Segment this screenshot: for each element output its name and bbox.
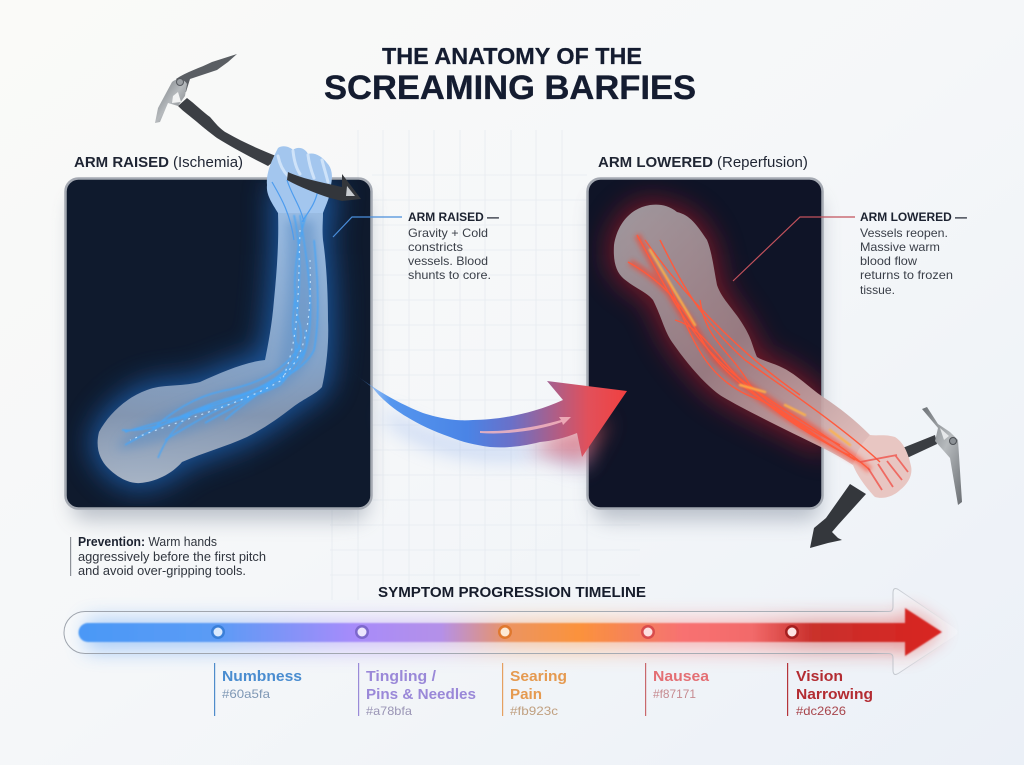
title	[324, 43, 696, 107]
label: vision narrowing: #dc2626	[796, 704, 846, 718]
illustration: blue arm	[98, 146, 332, 483]
node: vision narrowing	[785, 625, 799, 639]
callout: arm raised	[333, 212, 500, 282]
panel: arm lowered	[588, 178, 823, 520]
label: nausea: Nausea	[653, 668, 710, 685]
text block: prevention	[70, 535, 266, 578]
callout: arm raised: Gravity + Cold	[408, 226, 488, 240]
title: SCREAMING BARFIES	[324, 69, 696, 107]
label: tingling: #a78bfa	[366, 704, 412, 718]
illustration: red arm	[614, 205, 911, 498]
label: numbness	[214, 663, 302, 716]
label: numbness: #60a5fa	[222, 687, 270, 701]
panel: arm raised	[66, 178, 372, 520]
label: numbness: Numbness	[222, 668, 302, 685]
callout: arm lowered: Massive warm	[860, 240, 940, 254]
node: tingling	[355, 625, 369, 639]
callout: arm lowered: returns to frozen	[860, 268, 953, 282]
label: arm lowered heading: ARM LOWERED (Reperfusion)	[598, 154, 808, 171]
label: vision narrowing: Vision	[796, 668, 843, 685]
icon: ice axe raised, lower shaft	[287, 172, 361, 201]
callout: arm raised: shunts to core.	[408, 268, 491, 282]
heading: timeline: SYMPTOM PROGRESSION TIMELINE	[378, 584, 646, 601]
label: arm raised heading: ARM RAISED (Ischemia)	[74, 154, 243, 171]
label: searing pain: Pain	[510, 686, 542, 703]
title: THE ANATOMY OF THE	[382, 43, 642, 69]
callout: arm lowered	[733, 212, 968, 297]
icon: ice axe raised	[155, 54, 279, 166]
callout: arm lowered: blood flow	[860, 254, 917, 268]
text block: prevention: and avoid over-gripping tools.	[78, 564, 246, 578]
node: numbness	[211, 625, 225, 639]
callout: arm raised: constricts	[408, 240, 463, 254]
callout: arm raised: ARM RAISED —	[408, 212, 500, 224]
label: nausea	[645, 663, 710, 716]
text block: prevention: Prevention: Warm hands	[78, 535, 217, 549]
callout: arm lowered: ARM LOWERED —	[860, 212, 968, 224]
icon: ice axe lowered	[810, 407, 962, 548]
text block: prevention: aggressively before the first pitch	[78, 550, 266, 564]
callout: arm lowered: Vessels reopen.	[860, 226, 948, 240]
label: searing pain: #fb923c	[510, 704, 558, 718]
label: vision narrowing: Narrowing	[796, 686, 873, 703]
label: vision narrowing	[787, 663, 873, 718]
node: searing pain	[498, 625, 512, 639]
label: tingling: Pins & Needles	[366, 686, 476, 703]
label: nausea: #f87171	[653, 687, 696, 701]
callout: arm lowered: tissue.	[860, 283, 895, 297]
label: tingling	[358, 663, 476, 718]
callout: arm raised: vessels. Blood	[408, 254, 488, 268]
arrow: transition from ischemia to reperfusion	[352, 372, 627, 470]
label: searing pain	[502, 663, 567, 718]
node: nausea	[641, 625, 655, 639]
label: tingling: Tingling /	[366, 668, 437, 685]
chart: symptom timeline arrow	[64, 589, 958, 674]
label: searing pain: Searing	[510, 668, 567, 685]
